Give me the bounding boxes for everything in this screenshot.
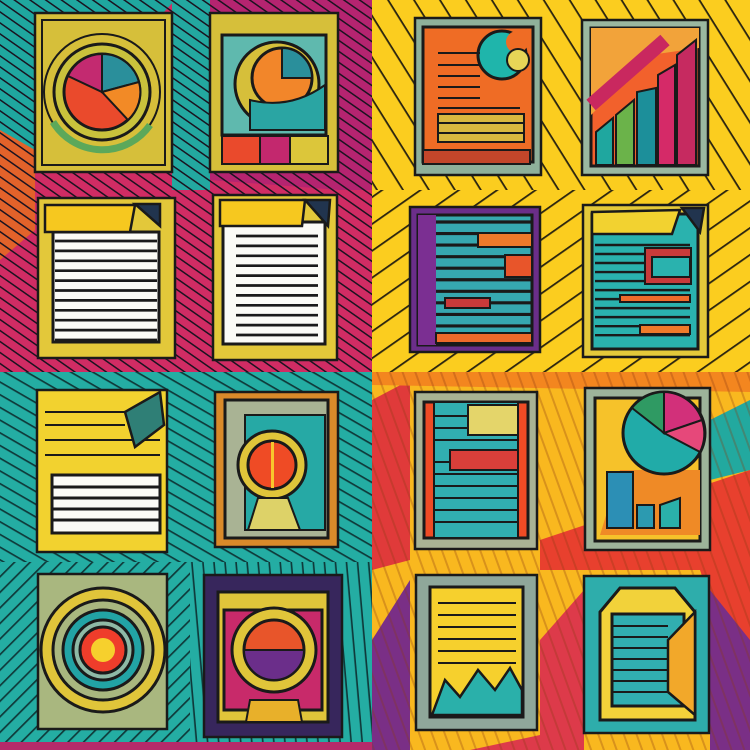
card 16: teal house-shaped list bbox=[584, 576, 709, 733]
card 2: target with colour bar bbox=[210, 13, 338, 172]
panel: bottom-left teal background bbox=[0, 372, 374, 750]
card 4: white list document bbox=[213, 195, 337, 360]
card 13: teal list with red frame bbox=[415, 392, 537, 549]
panel: bottom-right orange background bbox=[372, 372, 750, 750]
card 8: teal list with corner fold bbox=[583, 205, 708, 357]
card 11: concentric target bbox=[38, 574, 167, 729]
card 9: yellow document with white lower list bbox=[37, 390, 167, 552]
card 14: pie and bars bbox=[585, 388, 710, 550]
panel: top-left crimson background bbox=[0, 0, 374, 374]
card 15: page with mountain chart bbox=[416, 575, 537, 730]
card 3: white list document bbox=[38, 198, 175, 358]
card 1: pie target on yellow bbox=[35, 13, 172, 172]
pie chart bbox=[623, 392, 705, 474]
bars bbox=[596, 40, 696, 165]
card 5: orange report bbox=[415, 18, 541, 175]
card 6: bar chart with rising arrow bbox=[582, 20, 708, 175]
colour bar bbox=[222, 136, 328, 164]
card 10: medallion document bbox=[215, 392, 338, 547]
bars bbox=[607, 472, 680, 528]
card 7: purple framed striped list bbox=[410, 207, 540, 352]
panel: top-right yellow background bbox=[372, 0, 750, 374]
card 12: dark framed magenta target bbox=[204, 575, 342, 737]
pie chart bbox=[64, 54, 140, 130]
